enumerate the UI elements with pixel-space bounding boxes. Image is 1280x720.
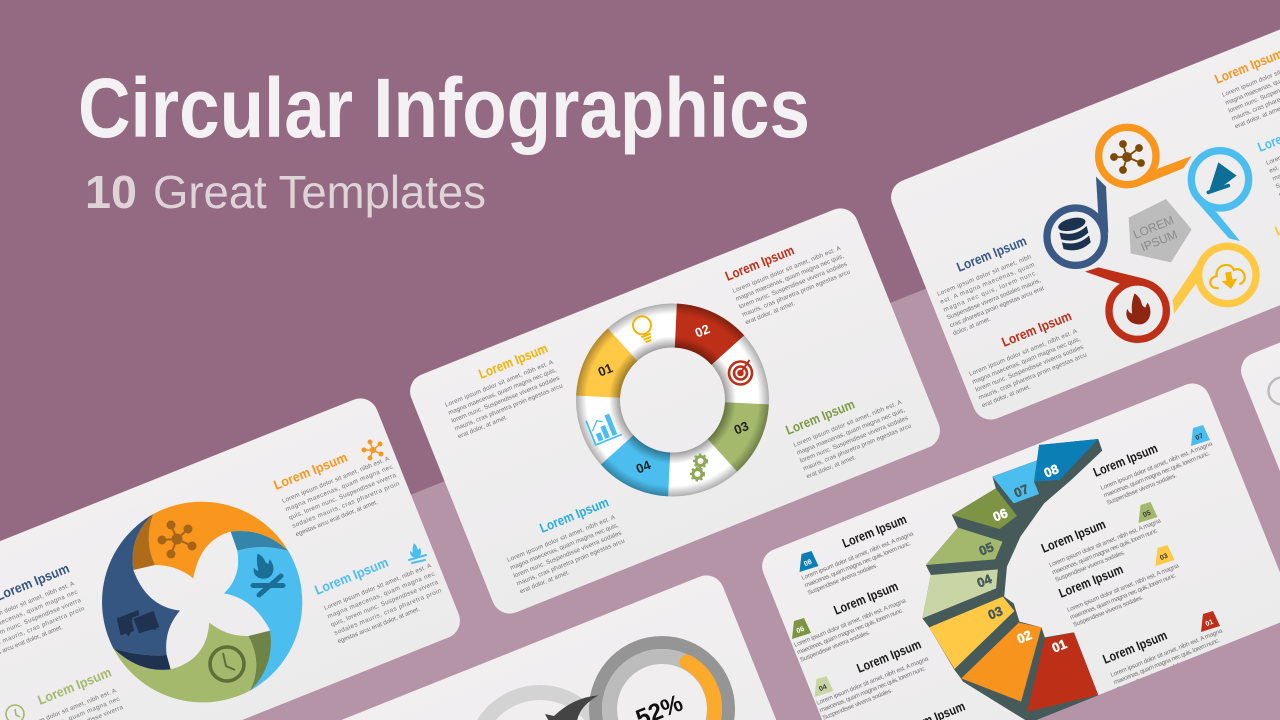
text: blue: lorem nunc. Suspendisse viverra sodales <box>512 530 623 580</box>
node: red <box>1085 267 1166 339</box>
text: orange <box>281 455 405 538</box>
text: 05: Suspendisse viverra sodales. <box>1054 549 1127 584</box>
badge 03 <box>1156 545 1174 566</box>
text: 03: Lorem ipsum dolor sit amet, nibh est. A magna <box>1066 562 1180 614</box>
heading: navy: Lorem Ipsum <box>955 233 1029 275</box>
text: 05: maecenas, quam magna nec quis, lorem nunc. <box>1051 527 1160 576</box>
icon: database <box>1057 215 1092 253</box>
text: navy: Suspendisse viverra sodales mauris, <box>946 277 1042 321</box>
text: blue <box>1265 146 1280 198</box>
ring numbers <box>596 321 751 476</box>
cycle diagram <box>1047 127 1256 339</box>
icon: clock <box>210 647 244 681</box>
small icon: blue campfire <box>409 543 426 563</box>
badge 06: 06 <box>796 626 806 635</box>
text: orange: quis, lorem nunc. Suspendisse viverra <box>288 472 398 522</box>
icon: campfire <box>251 551 283 595</box>
small icon: green clock <box>6 705 24 720</box>
badge 05: 05 <box>1142 510 1152 519</box>
text: blue: egestas arcu erat dolor, at amet. <box>337 606 421 645</box>
heading: red: Lorem Ipsum <box>1000 308 1074 350</box>
text: green: erat dolor, at amet. <box>805 454 857 480</box>
node: blue <box>1191 151 1249 241</box>
title: Circular Infographics <box>78 61 810 155</box>
ring numbers: 02 <box>693 321 712 340</box>
text: 07: maecenas, quam magna nec quis, lorem nunc. <box>1103 450 1211 499</box>
text: navy: Lorem ipsum dolor sit amet, nibh <box>936 253 1033 298</box>
slide card <box>0 393 465 720</box>
slide card <box>886 9 1280 425</box>
text: green: magna maecenas, quam magna nec quis, <box>796 407 906 457</box>
text: blue <box>506 514 630 595</box>
badge 07 <box>1191 425 1210 446</box>
icon: bar chart <box>586 410 622 445</box>
text: navy <box>936 253 1049 337</box>
text: orange: Lorem ipsum dolor sit amet, nibh est. A <box>281 455 391 505</box>
text: green: Lorem ipsum dolor sit amet, nibh est. A <box>793 399 904 449</box>
stair numbers: 01 <box>1050 636 1069 655</box>
text: 01: Suspendisse viverra sodales. <box>1116 659 1188 694</box>
ring numbers: 04 <box>634 457 654 476</box>
text: 01: maecenas, quam magna nec quis, lorem nunc. <box>1113 637 1221 686</box>
text: red: lorem nunc. Suspendisse viverra sodales <box>738 261 848 311</box>
text: yellow: lorem nunc. Suspendisse viverra sodales <box>450 375 561 425</box>
heading: 08: Lorem Ipsum <box>840 511 909 551</box>
heading: green: Lorem Ipsum <box>784 397 857 438</box>
text: orange: sodales mauris, cras pharetra proin <box>291 480 401 530</box>
light grey ring <box>474 692 606 720</box>
pentagon label: IPSUM <box>1139 227 1179 254</box>
text: red: magna maecenas, quam magna nec quis, <box>735 253 845 303</box>
pentagon label <box>1131 213 1179 254</box>
text: yellow: Lorem ipsum dolor sit amet, nibh est. A <box>444 359 555 409</box>
text: 08: Lorem ipsum dolor sit amet, nibh est. A magna <box>801 530 915 582</box>
text: yellow: mauris, cras pharetra proin egestas arcu <box>454 382 564 432</box>
background: light plum band <box>0 147 1280 720</box>
text: red: magna maecenas, quam magna nec quis, <box>971 336 1082 386</box>
text: blue: magna maecenas, quam magna nec quis, <box>509 522 620 572</box>
text: green <box>793 399 916 480</box>
text: 04: maecenas, quam magna nec quis, lorem nunc. <box>819 665 927 714</box>
text: blue: erat dolor, at amet. <box>519 569 571 595</box>
badge 01 <box>1201 611 1220 632</box>
text: red <box>732 245 855 326</box>
subtitle: Great Templates <box>153 166 486 218</box>
text: red: erat dolor, at amet. <box>744 300 796 326</box>
node: navy <box>1047 177 1108 265</box>
pentagon label: LOREM <box>1131 213 1176 242</box>
stair numbers: 06 <box>991 505 1010 524</box>
text: 03: Suspendisse viverra sodales. <box>1072 594 1145 629</box>
badge 03: 03 <box>1159 553 1169 562</box>
heading: 05: Lorem Ipsum <box>1039 516 1108 556</box>
icon: lightbulb <box>630 314 657 344</box>
text: yellow <box>444 359 568 440</box>
middle grey ring <box>610 656 714 720</box>
text: blue: Lorem ipsum dolor sit amet, nibh est. A <box>323 562 433 612</box>
panel: percentage rings slide <box>271 570 811 720</box>
badge 08 <box>800 551 818 572</box>
text: blue: quis, lorem nunc. Suspendisse viverra <box>330 579 440 629</box>
badge 08: 08 <box>803 559 813 568</box>
badge 05 <box>1138 502 1158 523</box>
text: blue: sodales mauris, cras pharetra proin <box>333 587 443 637</box>
staircase chart <box>922 439 1108 720</box>
icon: network <box>158 522 196 558</box>
ring chart <box>594 322 751 478</box>
icon: chat bubbles <box>117 610 160 637</box>
text: blue <box>323 562 447 645</box>
stair numbers: 02 <box>1015 627 1034 646</box>
stair numbers <box>975 461 1069 655</box>
heading: 01: Lorem Ipsum <box>1101 627 1169 667</box>
text: green: lorem nunc. Suspendisse viverra sodales <box>799 415 909 465</box>
text: blue: mauris, cras pharetra proin egestas arcu <box>516 537 626 587</box>
text: navy: dolor, at amet. <box>952 316 992 337</box>
text: 07: Lorem ipsum dolor sit amet, nibh est. A magna <box>1100 440 1214 492</box>
stair numbers: 04 <box>975 571 995 590</box>
text: 04: Lorem ipsum dolor sit amet, nibh est. A magna <box>816 655 930 707</box>
text: 03: maecenas, quam magna nec quis, lorem nunc. <box>1069 572 1178 621</box>
ring numbers: 01 <box>596 360 615 379</box>
icon: megaphone <box>1208 162 1237 192</box>
node: yellow <box>1173 246 1256 314</box>
badges <box>792 425 1220 697</box>
panel: pinwheel slide <box>0 393 465 720</box>
badge 04: 04 <box>818 684 828 693</box>
heading: 07: Lorem Ipsum <box>1091 440 1160 480</box>
text: yellow: erat dolor, at amet. <box>457 414 509 440</box>
icon: cloud download <box>1208 262 1246 292</box>
small icon: orange network <box>362 440 383 460</box>
heading: 06: Lorem Ipsum <box>832 578 900 618</box>
curved arrow <box>545 695 598 720</box>
text: 08: Suspendisse viverra sodales. <box>807 562 879 597</box>
heading: red: Lorem Ipsum <box>723 243 796 284</box>
subtitle: 10 <box>85 166 137 218</box>
heading: blue: Lorem Ipsum <box>538 495 611 536</box>
text: navy <box>0 580 90 663</box>
grey ring icon <box>1268 378 1280 404</box>
text: red: Lorem ipsum dolor sit amet, nibh est. A <box>968 328 1079 378</box>
text: red: Lorem ipsum dolor sit amet, nibh est. A <box>732 245 843 295</box>
heading: 04: Lorem Ipsum <box>855 636 923 676</box>
outer dark ring <box>596 642 728 720</box>
text: 07: Suspendisse viverra sodales. <box>1106 472 1178 507</box>
text: red <box>968 328 1092 409</box>
text: navy: cras pharetra proin egestas arcu erat <box>949 285 1045 329</box>
heading: green: Lorem Ipsum <box>36 665 113 708</box>
icon: gears <box>691 454 707 480</box>
stair numbers: 03 <box>986 603 1005 622</box>
heading: blue: Lorem Ipsum <box>313 555 390 598</box>
pinwheel chart <box>102 502 302 702</box>
slide card <box>1236 182 1280 598</box>
badge 04 <box>814 676 834 697</box>
panel: far-right slide <box>1236 182 1280 598</box>
node: orange <box>1099 127 1192 186</box>
slide card <box>757 378 1280 720</box>
badge 07: 07 <box>1195 433 1205 442</box>
heading: yellow: Lorem Ipsum <box>477 341 550 382</box>
text: red: lorem nunc. Suspendisse viverra sodales <box>974 344 1085 394</box>
text: 06: Suspendisse viverra sodales. <box>799 629 872 664</box>
text: blue: magna maecenas, quam magna nec <box>326 571 436 620</box>
panel: staircase spiral slide <box>757 378 1280 720</box>
slide card <box>271 570 811 720</box>
orange progress arc <box>687 662 715 716</box>
heading: orange: Lorem Ipsum <box>272 450 349 493</box>
text: red: erat dolor, at amet. <box>981 383 1032 409</box>
center pentagon <box>1129 199 1192 262</box>
badge 01: 01 <box>1205 619 1215 628</box>
stair numbers: 07 <box>1012 481 1031 500</box>
text: 05: Lorem ipsum dolor sit amet, nibh est. A magna <box>1048 517 1162 569</box>
text: 06: Lorem ipsum dolor sit amet, nibh est. A magna <box>793 597 907 649</box>
text: navy: est. A magna maecenas, quam <box>939 261 1036 306</box>
icon: flame <box>1126 293 1150 324</box>
text: yellow: magna maecenas, quam magna nec quis, <box>447 367 558 417</box>
badge 06 <box>792 618 811 639</box>
ring numbers: 03 <box>732 418 751 437</box>
text: orange <box>1221 50 1280 130</box>
text: orange: egestas arcu erat dolor, at amet. <box>295 499 379 538</box>
icon: target <box>729 360 752 384</box>
text: 01: Lorem ipsum dolor sit amet, nibh est. A magna <box>1110 627 1224 679</box>
stair numbers: 08 <box>1042 461 1061 480</box>
stair numbers: 05 <box>977 539 996 558</box>
icon: network <box>1111 141 1144 173</box>
slide card <box>405 203 945 619</box>
panel: donut ring slide <box>405 203 945 619</box>
text: 06: maecenas, quam magna nec quis, lorem nunc. <box>796 607 905 656</box>
text: 08: maecenas, quam magna nec quis, lorem nunc. <box>804 540 912 589</box>
panel: ring-and-tail cycle slide <box>886 9 1280 425</box>
text: navy: magna nec quis, lorem nunc. <box>942 269 1039 314</box>
text: green: mauris, cras pharetra proin egestas arcu <box>802 422 913 472</box>
text: red: mauris, cras pharetra proin egestas arcu <box>978 351 1088 401</box>
heading: 03: Lorem Ipsum <box>1057 561 1125 601</box>
text: orange: magna maecenas, quam magna nec <box>284 464 394 513</box>
text: red: mauris, cras pharetra proin egestas arcu <box>741 268 852 318</box>
text: blue: Lorem ipsum dolor sit amet, nibh est. A <box>506 514 617 564</box>
